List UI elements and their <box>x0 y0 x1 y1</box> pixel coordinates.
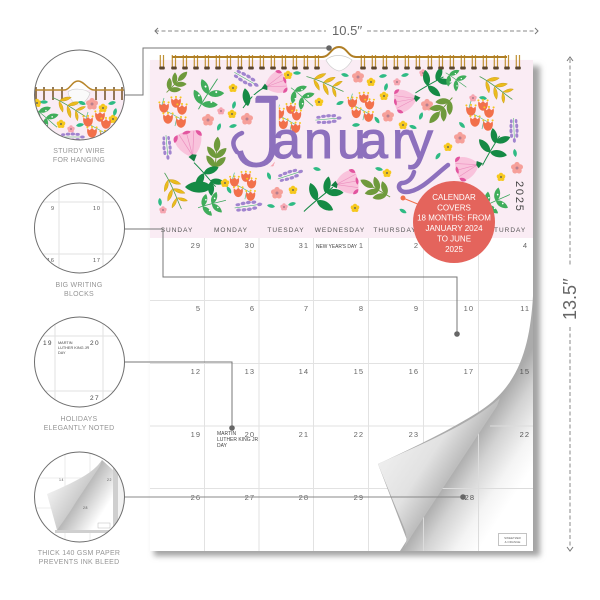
date numbers: 19 <box>191 430 201 439</box>
callout: calendar covers 18 months <box>413 181 495 263</box>
page curl: 28 <box>465 493 475 502</box>
holiday note: Martin Luther King Jr Day: MARTIN <box>217 431 236 437</box>
dimension: width 10.5 inches: 10.5′′ <box>332 23 363 38</box>
date numbers: 7 <box>304 304 309 313</box>
date numbers: 22 <box>354 430 364 439</box>
callout: calendar covers 18 months: TO JUNE <box>437 234 471 244</box>
date numbers: 23 <box>409 430 419 439</box>
callout: calendar covers 18 months: CALENDAR <box>432 193 476 202</box>
connector: writing blocks <box>124 229 460 337</box>
logo box <box>498 534 526 546</box>
label: holidays: ELEGANTLY NOTED <box>44 425 114 432</box>
label: sturdy wire: FOR HANGING <box>53 157 105 164</box>
date numbers: 28 <box>299 493 309 502</box>
dimension: height 13.5 inches <box>560 57 580 551</box>
callout: calendar covers 18 months: 18 MONTHS: FROM <box>417 214 491 222</box>
label: thick paper: PREVENTS INK BLEED <box>39 559 119 566</box>
connector: paper <box>124 494 466 500</box>
label: big writing blocks: BLOCKS <box>64 291 94 298</box>
date numbers: 9 <box>414 304 419 313</box>
dimension: width 10.5 inches <box>155 23 538 38</box>
detail circle: thick paper: 28 <box>83 506 88 510</box>
weekday headings: SUNDAY <box>161 227 193 234</box>
date numbers: 17 <box>464 367 474 376</box>
detail circle: thick paper: 14 <box>59 478 64 482</box>
calendar header panel <box>150 60 533 238</box>
date numbers <box>191 241 530 502</box>
detail circle: big writing blocks <box>34 182 125 274</box>
detail circle: big writing blocks: 17 <box>93 258 101 264</box>
date numbers: 29 <box>354 493 364 502</box>
holiday note: New Year's Day: NEW YEAR'S DAY <box>316 244 358 250</box>
detail circle: big writing blocks: 9 <box>51 206 55 212</box>
detail circle: holidays: 20 <box>90 340 100 347</box>
date numbers: 13 <box>245 367 255 376</box>
date numbers: 5 <box>196 304 201 313</box>
connector: holidays <box>124 362 235 431</box>
detail circle: holidays: MARTIN <box>58 341 73 345</box>
date numbers: 8 <box>359 304 364 313</box>
detail circle: holidays: LUTHER KING JR <box>58 346 89 350</box>
detail circle: thick paper <box>34 452 125 542</box>
page curl: 22 <box>520 430 530 439</box>
title: January: anuary <box>272 112 433 170</box>
weekday headings <box>161 227 526 234</box>
date numbers: 12 <box>191 367 201 376</box>
date numbers: 1 <box>359 241 364 250</box>
connector: wire <box>124 45 332 95</box>
detail circle: thick paper: 22 <box>107 478 112 482</box>
floral illustrations <box>156 60 523 226</box>
date numbers: 14 <box>299 367 309 376</box>
detail circle: holidays: 27 <box>90 395 100 402</box>
calendar grid <box>150 238 533 551</box>
callout: calendar covers 18 months: JANUARY 2024 <box>425 224 483 233</box>
weekday headings: THURSDAY <box>373 227 417 234</box>
callout: calendar covers 18 months: COVERS <box>437 204 471 212</box>
detail circle: holidays: 19 <box>43 340 53 347</box>
detail circle: holidays: DAY <box>58 351 66 355</box>
label: big writing blocks: BIG WRITING <box>55 282 103 289</box>
spiral wire binding <box>159 47 521 71</box>
date numbers: 2 <box>414 241 419 250</box>
detail circle: holidays <box>34 316 125 408</box>
title: January <box>233 75 448 192</box>
page curl: 15 <box>520 367 530 376</box>
page drop shadow <box>154 66 540 556</box>
date numbers: 20 <box>245 430 255 439</box>
date numbers: 4 <box>523 241 528 250</box>
calendar page <box>150 60 533 551</box>
date numbers: 27 <box>245 493 255 502</box>
title: January: J <box>233 75 285 191</box>
date numbers: 6 <box>250 304 255 313</box>
date numbers: 26 <box>191 493 201 502</box>
label: thick paper: THICK 140 GSM PAPER <box>38 550 120 557</box>
date numbers: 21 <box>299 430 309 439</box>
date numbers: 11 <box>520 304 530 313</box>
date numbers: 30 <box>245 241 255 250</box>
callout: calendar covers 18 months: 2025 <box>445 245 463 254</box>
date numbers: 15 <box>354 367 364 376</box>
label: sturdy wire: STURDY WIRE <box>53 148 105 155</box>
holiday note: Martin Luther King Jr Day: DAY <box>217 443 228 449</box>
weekday headings: SATURDAY <box>484 227 526 234</box>
page curl <box>378 296 533 551</box>
logo box: & ORANGE <box>505 540 520 544</box>
detail circle: big writing blocks: 16 <box>47 258 55 264</box>
detail circle: sturdy wire <box>27 50 126 142</box>
weekday headings: MONDAY <box>214 227 248 234</box>
date numbers: 16 <box>409 367 419 376</box>
date numbers: 10 <box>464 304 474 313</box>
detail circle: big writing blocks: 10 <box>93 206 101 212</box>
weekday headings: TUESDAY <box>267 227 305 234</box>
weekday headings: WEDNESDAY <box>315 227 365 234</box>
year label: 2025 <box>513 181 525 213</box>
date numbers: 31 <box>299 241 309 250</box>
holiday note: Martin Luther King Jr Day: LUTHER KING JR <box>217 437 259 443</box>
logo box: SWEETZER <box>504 536 522 540</box>
label: holidays: HOLIDAYS <box>61 416 98 423</box>
dimension: height 13.5 inches: 13.5′′ <box>560 278 580 320</box>
date numbers: 29 <box>191 241 201 250</box>
